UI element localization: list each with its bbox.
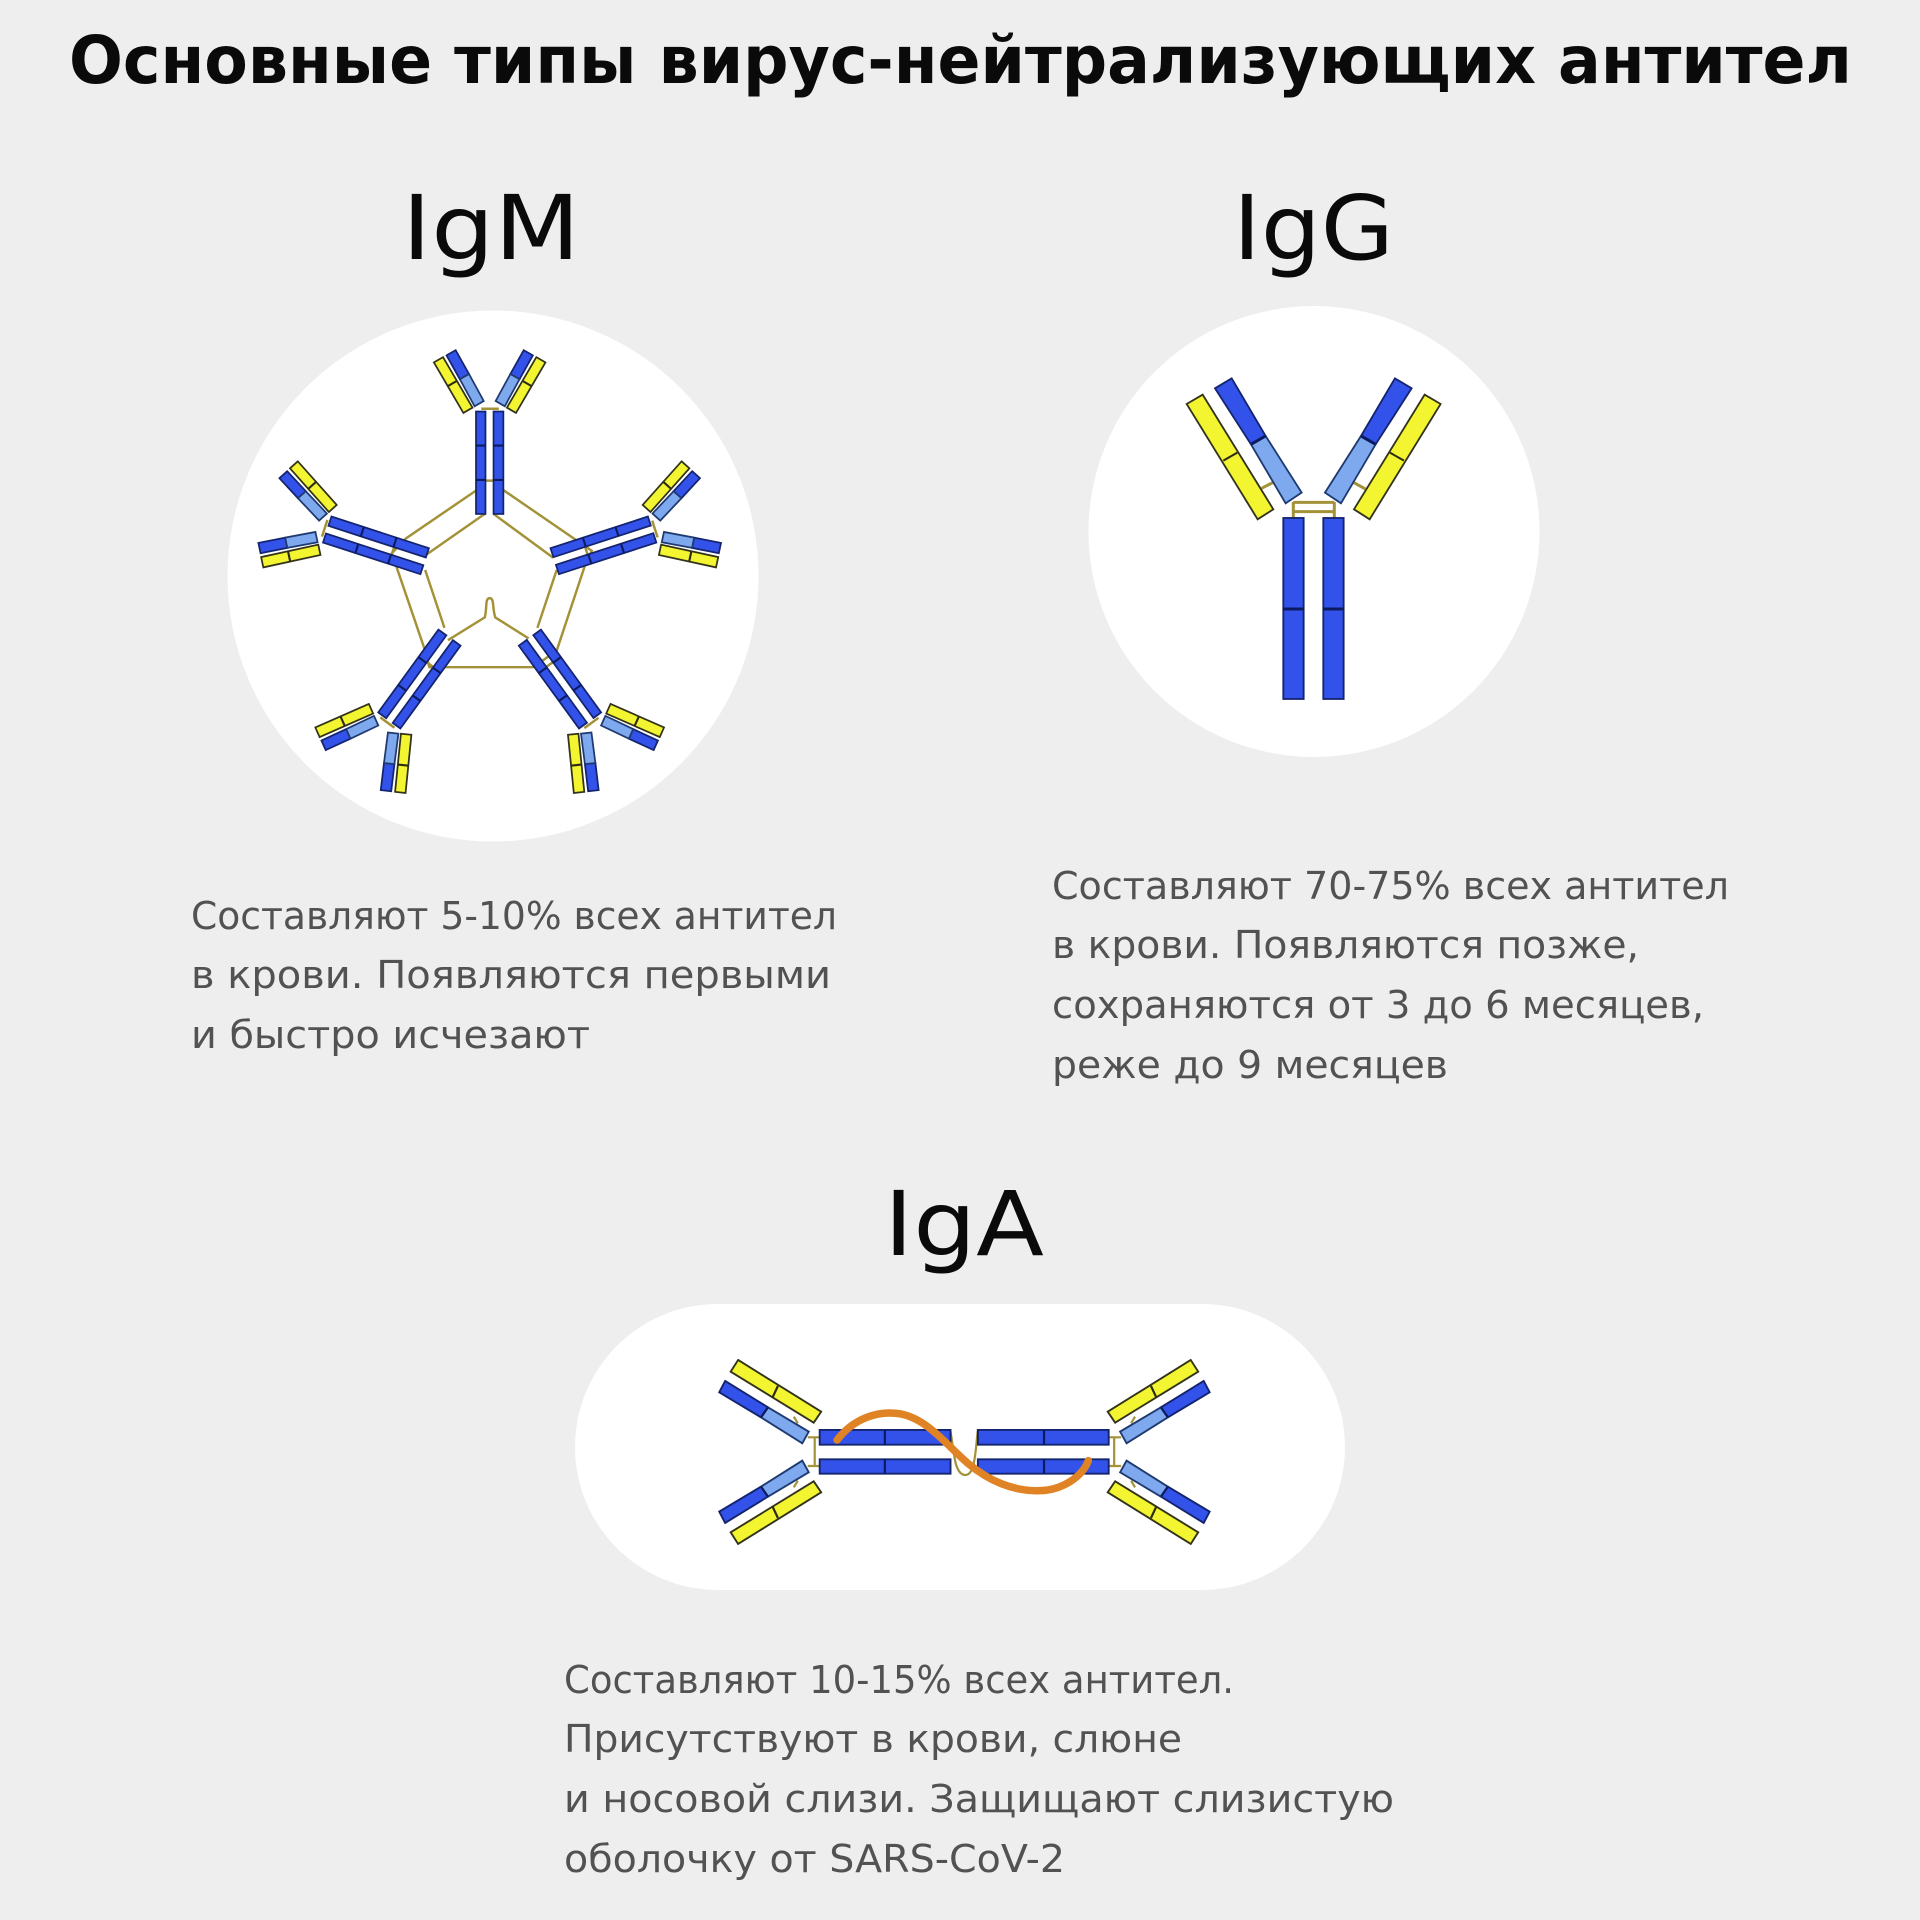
IgM pentamer diagram (252, 350, 728, 803)
IgA description: оболочку от SARS-CoV-2 (564, 1837, 1065, 1881)
heading: IgM: IgM (402, 176, 580, 280)
lower-right Fab (1108, 1461, 1210, 1544)
pentagon joining chains (392, 489, 592, 667)
light-chain links (1262, 483, 1365, 489)
IgA white pill (575, 1304, 1345, 1590)
monomer arm 3 (485, 605, 671, 803)
IgA dimer diagram (719, 1360, 1210, 1544)
upper-left Fab (719, 1360, 821, 1443)
monomer arm 4 (308, 605, 495, 803)
heading: IgG: IgG (1233, 176, 1394, 280)
IgM description: Составляют 5-10% всех антител (191, 894, 837, 938)
IgA description: Присутствуют в крови, слюне (564, 1717, 1182, 1761)
monomer arm 5 (252, 458, 442, 614)
IgG antibody diagram (1187, 378, 1441, 699)
IgG description: реже до 9 месяцев (1052, 1043, 1448, 1087)
IgM description (191, 894, 837, 1057)
upper-right Fab (1108, 1360, 1210, 1443)
J chain (951, 1430, 978, 1475)
panel: IgA (564, 1172, 1394, 1881)
IgG description: в крови. Появляются позже, (1052, 923, 1639, 967)
hinge (1293, 502, 1334, 517)
IgG description: Составляют 70-75% всех антител (1052, 864, 1729, 908)
orange secretory component (837, 1413, 1088, 1491)
heading: IgA: IgA (884, 1172, 1044, 1276)
title: Основные типы вирус-нейтрализующих антител (69, 22, 1852, 99)
left Fab (1187, 378, 1302, 519)
lower-left Fab (719, 1461, 821, 1544)
panel: IgG (1052, 176, 1729, 1087)
Fc stems (820, 1430, 1109, 1474)
IgA description (564, 1658, 1394, 1881)
IgM description: и быстро исчезают (191, 1013, 590, 1057)
IgG description (1052, 864, 1729, 1087)
Fc stems (1283, 518, 1344, 699)
IgG white circle (1088, 306, 1540, 757)
monomer arm 2 (537, 458, 728, 614)
IgA description: Составляют 10-15% всех антител. (564, 1658, 1234, 1702)
right Fab (1325, 378, 1441, 519)
IgM description: в крови. Появляются первыми (191, 953, 831, 997)
IgA description: и носовой слизи. Защищают слизистую (564, 1777, 1394, 1821)
IgM white circle (228, 310, 758, 842)
IgG description: сохраняются от 3 до 6 месяцев, (1052, 983, 1704, 1027)
panel: IgM (191, 176, 837, 1057)
monomer arm 1 (434, 350, 545, 514)
joining links (794, 1417, 1135, 1487)
